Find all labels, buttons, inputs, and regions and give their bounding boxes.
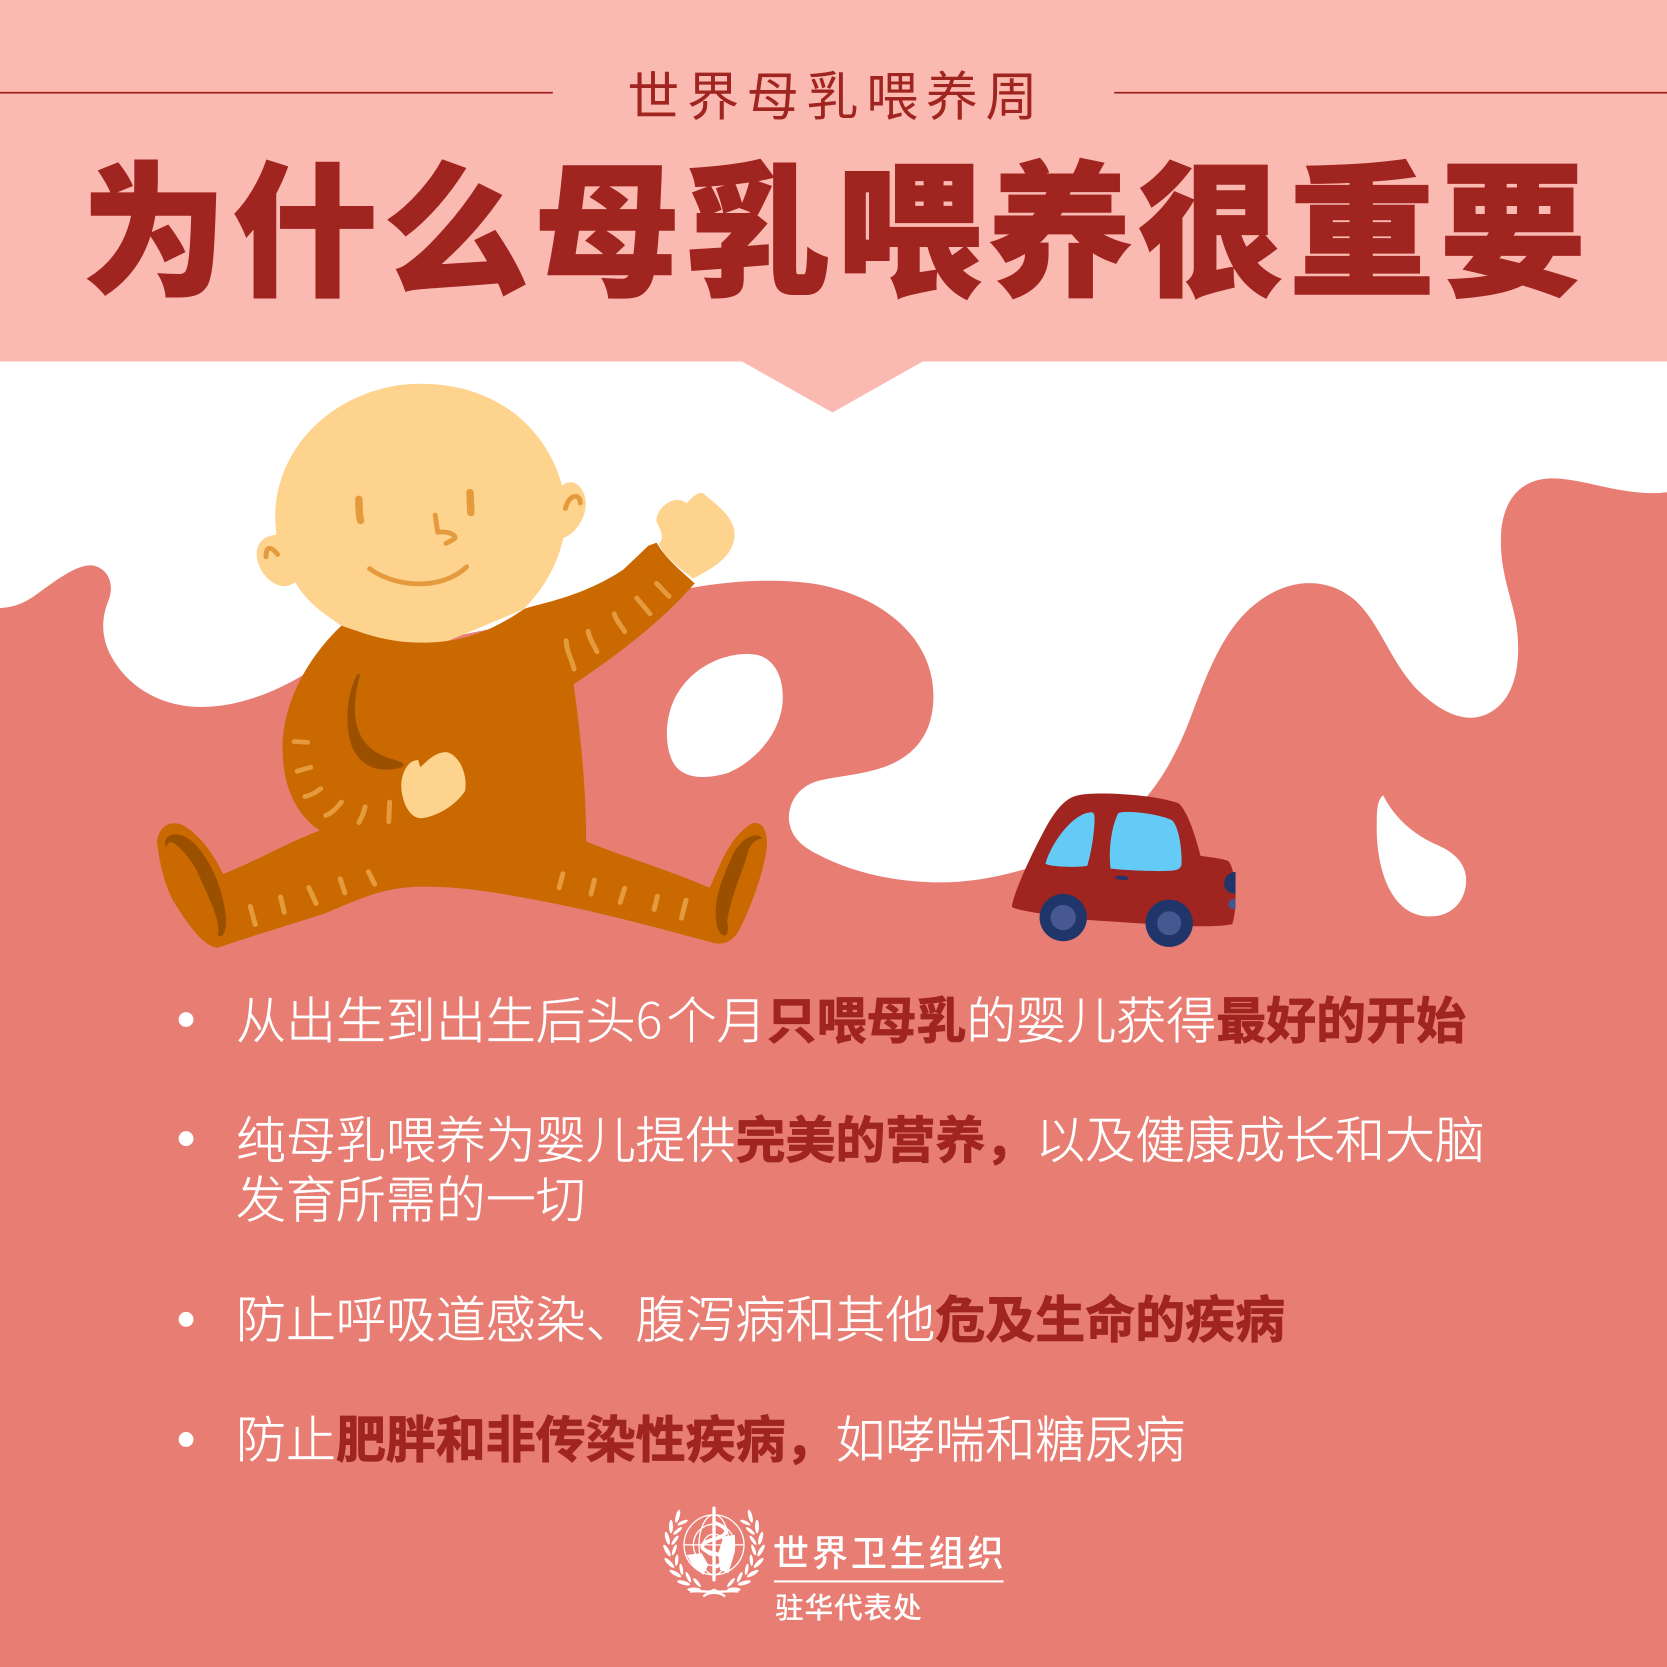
baby illustration xyxy=(157,384,767,948)
onesie xyxy=(157,543,767,948)
bullet 2: 纯母乳喂养为婴儿提供完美的营养，以及健康成长和大脑 xyxy=(236,1113,1485,1169)
bullet 2 xyxy=(179,1113,1485,1228)
bullet 4: 防止肥胖和非传染性疾病，如哮喘和糖尿病 xyxy=(236,1413,1185,1469)
raised fist xyxy=(656,493,735,579)
rear wheel xyxy=(1146,900,1193,947)
bullet 2: 发育所需的一切 xyxy=(236,1172,586,1228)
tail lights xyxy=(1224,872,1236,894)
milk splash background xyxy=(0,478,1667,1667)
office name: 驻华代表处 xyxy=(775,1593,922,1625)
left laurel xyxy=(662,1509,702,1592)
bullet 1: 从出生到出生后头6个月只喂母乳的婴儿获得最好的开始 xyxy=(236,982,1466,1054)
ribbon xyxy=(690,1590,738,1597)
subtitle: 世界母乳喂养周 xyxy=(627,69,1038,127)
car body xyxy=(1012,793,1236,926)
face and clothing ticks xyxy=(250,492,686,925)
organisation name: 世界卫生组织 xyxy=(773,1533,1004,1574)
car windows xyxy=(1046,812,1182,871)
dark folds xyxy=(165,674,762,936)
toy car xyxy=(1012,793,1236,947)
tummy hand xyxy=(401,752,466,818)
WHO emblem xyxy=(662,1507,766,1597)
car door handle xyxy=(1115,875,1129,881)
bullet 3: 防止呼吸道感染、腹泻病和其他危及生命的疾病 xyxy=(236,1292,1285,1348)
milk droplet xyxy=(1377,795,1466,916)
title: 为什么母乳喂养很重要 xyxy=(82,153,1585,315)
WHO logo xyxy=(662,1507,1004,1625)
right laurel xyxy=(726,1509,766,1592)
baby head xyxy=(257,384,586,653)
header band xyxy=(0,0,1667,412)
bullet list xyxy=(179,982,1485,1469)
front wheel xyxy=(1040,894,1087,941)
